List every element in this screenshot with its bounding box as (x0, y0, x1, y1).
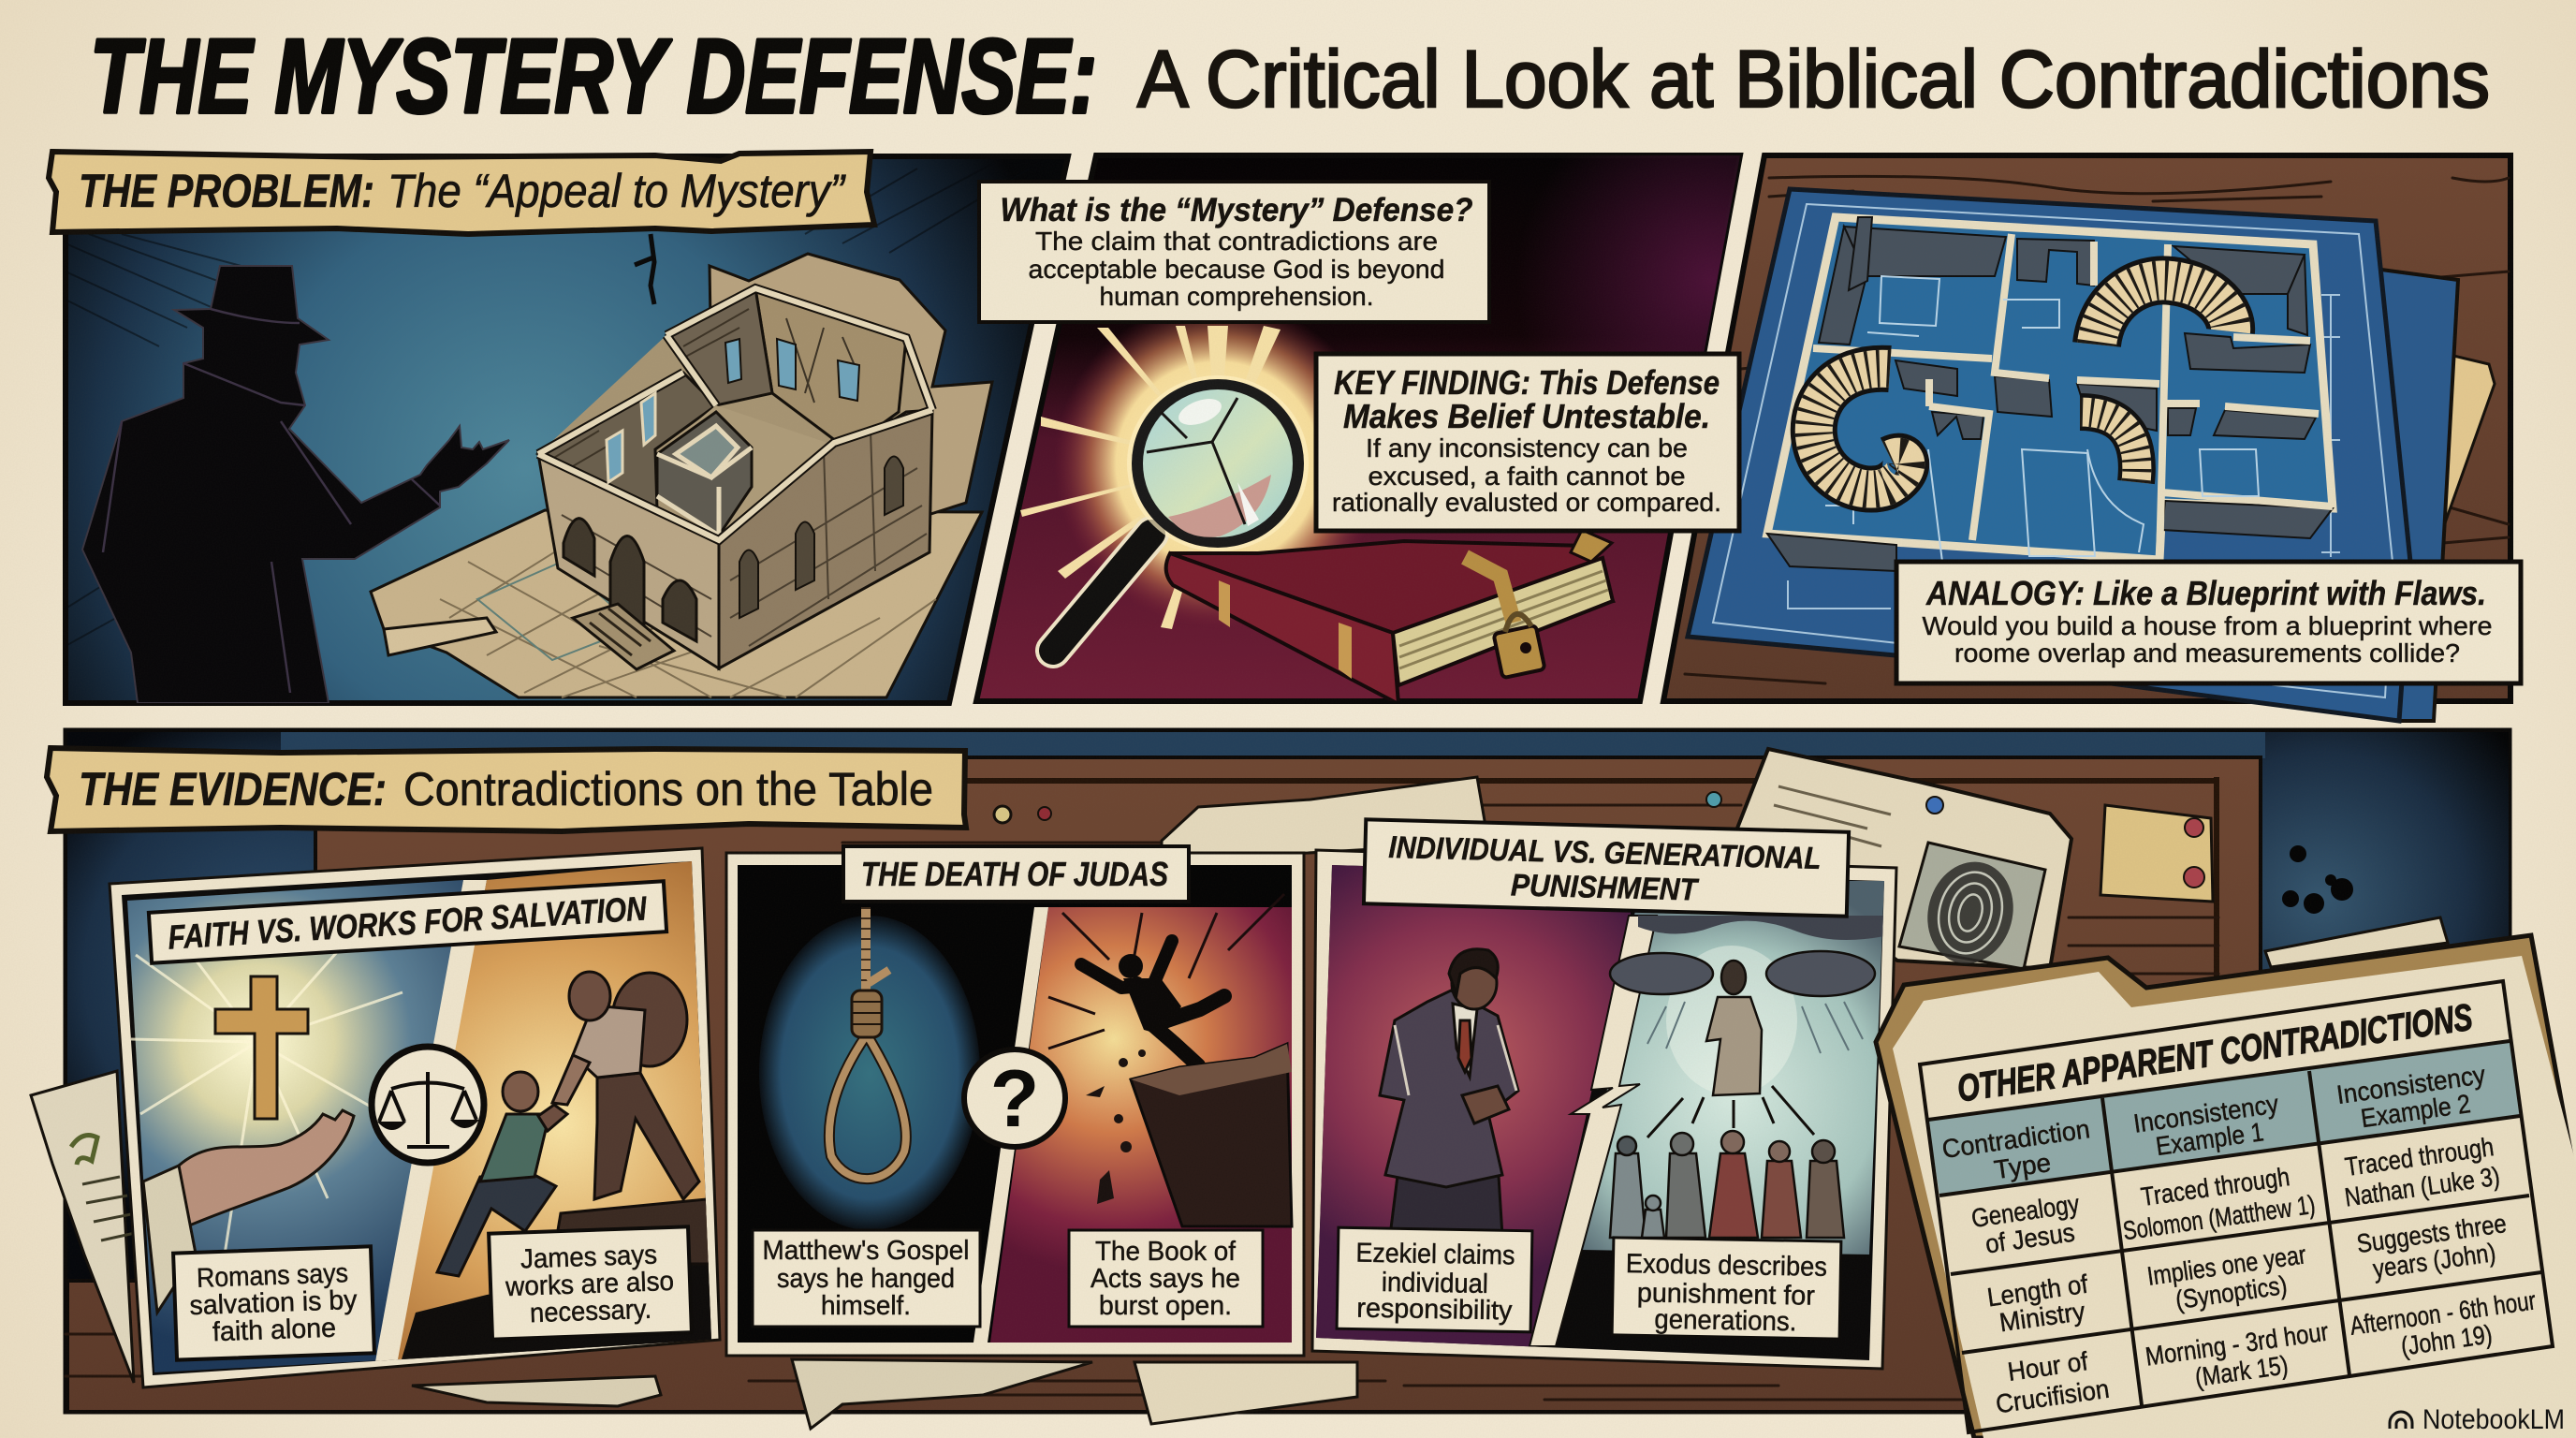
caption: exodus (1612, 1238, 1841, 1339)
table: Solomon (Matthew 1) (2121, 1190, 2317, 1245)
table: years (John) (2371, 1238, 2497, 1284)
table: Inconsistency (2334, 1060, 2487, 1109)
callout: analogy: roome overlap and measurements collide? (1954, 638, 2460, 668)
panel: the problem (49, 152, 1068, 703)
table: of Jesus (1983, 1218, 2076, 1259)
banner: the evidence: Contradictions on the Table (403, 763, 933, 815)
table: Inconsistency (2131, 1089, 2280, 1138)
banner: the problem: THE PROBLEM: (79, 165, 374, 217)
table: Morning - 3rd hour (2144, 1317, 2330, 1372)
title: THE MYSTERY DEFENSE: (90, 18, 1097, 135)
callout: what is the mystery defense: What is the “Mystery” Defense? (1000, 192, 1473, 228)
callout: what is the mystery defense: human comprehension. (1099, 282, 1374, 311)
caption: romans: salvation is by (189, 1285, 358, 1321)
caption: romans: Romans says (196, 1258, 348, 1294)
table: Example 1 (2154, 1117, 2265, 1161)
banner: the evidence (47, 748, 966, 831)
caption: ezekiel: responsibility (1356, 1294, 1513, 1326)
icon: detective silhouette (82, 266, 509, 703)
icon: question mark (964, 1049, 1065, 1147)
callout: what is the mystery defense: The claim that contradictions are (1035, 227, 1438, 256)
card: the death of judas (726, 846, 1304, 1356)
callout: what is the mystery defense (979, 182, 1489, 322)
card title: individual vs generational: PUNISHMENT (1511, 867, 1700, 907)
illustration: magnifier and locked book (1020, 150, 1750, 704)
table: Crucifision (1994, 1374, 2111, 1418)
caption: matthew: himself. (821, 1291, 911, 1321)
caption: matthew: says he hanged (777, 1264, 955, 1294)
table: Genealogy (1969, 1189, 2081, 1233)
figure: robed figure and descendants (1610, 916, 1884, 1238)
caption: acts: The Book of (1095, 1237, 1237, 1267)
caption: james: works are also (505, 1267, 675, 1302)
figures: helping hand (437, 972, 699, 1276)
card title: judas (843, 846, 1189, 902)
card title: judas: THE DEATH OF JUDAS (861, 855, 1168, 893)
table: Afternoon - 6th hour (2348, 1285, 2538, 1341)
wooden evidence board (66, 757, 2261, 1412)
table: Length of (1985, 1269, 2090, 1312)
card: individual vs generational (1310, 819, 1896, 1369)
illustration: flawed blueprint (1685, 176, 2509, 721)
panel: mystery defense (976, 150, 1750, 704)
caption: ezekiel: Ezekiel claims (1355, 1239, 1515, 1271)
caption: exodus: Exodus describes (1626, 1249, 1827, 1283)
caption: romans: faith alone (212, 1313, 337, 1347)
caption: romans (173, 1246, 374, 1360)
table: Implies one year (2145, 1240, 2308, 1291)
caption: matthew (753, 1230, 980, 1327)
panel: the evidence (31, 730, 2510, 1429)
illustration: ruined building on plans (66, 164, 1030, 703)
table: (John 19) (2399, 1319, 2494, 1361)
title: A Critical Look at Biblical Contradictions (1137, 35, 2490, 125)
caption: acts (1069, 1230, 1263, 1327)
caption: exodus: generations. (1654, 1305, 1797, 1337)
left scene: noose (759, 907, 980, 1230)
card title: individual vs generational: INDIVIDUAL VS. GENERATIONAL (1388, 829, 1822, 875)
banner: the evidence: THE EVIDENCE: (79, 763, 387, 815)
table (1920, 981, 2553, 1432)
table: (Synoptics) (2174, 1270, 2289, 1314)
panel: blueprint analogy (1663, 155, 2521, 721)
banner: the problem: The “Appeal to Mystery” (388, 165, 846, 217)
title (90, 18, 2490, 135)
caption: james: James says (520, 1240, 658, 1275)
callout: key finding (1316, 354, 1739, 531)
caption: matthew: Matthew's Gospel (762, 1236, 970, 1266)
icon: question mark: ? (990, 1054, 1039, 1144)
callout: key finding: If any inconsistency can be (1366, 433, 1688, 462)
caption: exodus: punishment for (1637, 1278, 1815, 1312)
pinned papers and photo (31, 749, 2448, 1429)
callout: what is the mystery defense: acceptable because God is beyond (1028, 255, 1445, 284)
callout: analogy: Would you build a house from a blueprint where (1923, 611, 2492, 640)
right scene: falling figure (973, 894, 1292, 1343)
callout: key finding: rationally evalusted or compared. (1332, 488, 1721, 517)
left scene: cross and open hand (127, 861, 711, 1372)
table: Ministry (1998, 1297, 2086, 1337)
table: Nathan (Luke 3) (2343, 1162, 2502, 1212)
callout: key finding: KEY FINDING: This Defense (1334, 363, 1720, 402)
figure: man in suit (1380, 949, 1518, 1236)
table: Example 2 (2359, 1089, 2472, 1133)
caption: ezekiel (1337, 1227, 1532, 1332)
caption: james: necessary. (530, 1295, 652, 1328)
caption: acts: Acts says he (1090, 1264, 1240, 1294)
card: faith vs. works (110, 848, 720, 1387)
callout: analogy: ANALOGY: Like a Blueprint with Flaws. (1925, 574, 2486, 612)
table: Traced through (2139, 1162, 2291, 1211)
callout: key finding: excused, a faith cannot be (1368, 462, 1685, 491)
caption: ezekiel: individual (1382, 1268, 1488, 1299)
card title: faith vs works: FAITH VS. WORKS FOR SALVATION (167, 888, 649, 957)
table: Hour of (2006, 1346, 2090, 1387)
table: Type (1992, 1148, 2053, 1184)
card title: individual vs generational (1364, 819, 1849, 917)
table: Contradiction (1940, 1114, 2092, 1164)
table: Traced through (2343, 1132, 2496, 1181)
caption: james (489, 1226, 692, 1340)
icon: balance scale (372, 1047, 484, 1163)
caption: acts: burst open. (1099, 1291, 1232, 1321)
callout: key finding: Makes Belief Untestable. (1343, 397, 1710, 435)
banner: the problem (49, 152, 874, 234)
table: Suggests three (2355, 1209, 2509, 1258)
callout: analogy (1896, 562, 2521, 683)
table: (Mark 15) (2193, 1350, 2290, 1392)
card scenes (1310, 861, 1891, 1367)
folder: other apparent contradictions (1876, 935, 2576, 1438)
